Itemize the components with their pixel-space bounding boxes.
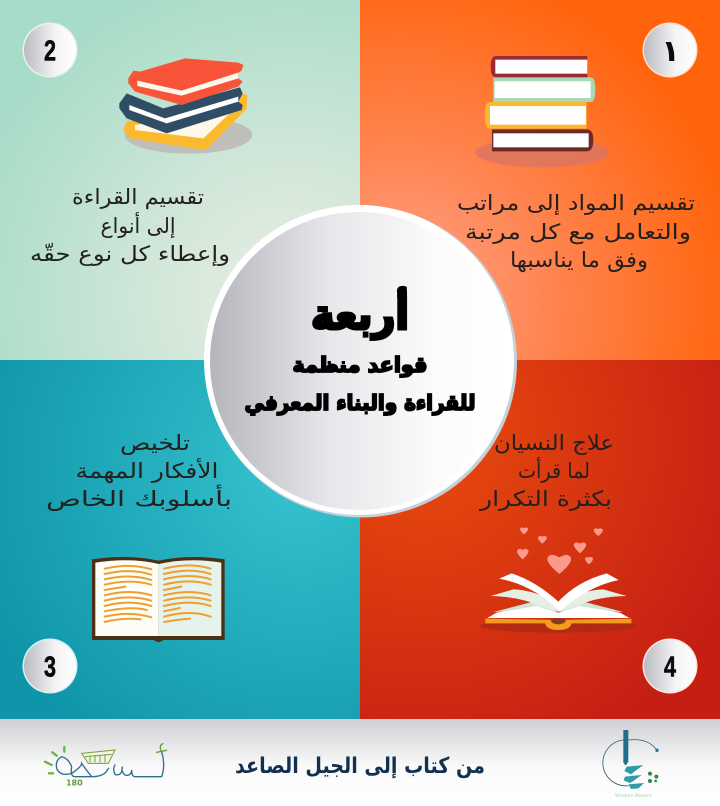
text: rule 3: تلخيص bbox=[120, 431, 190, 455]
text: rule 1: والتعامل مع كل مرتبة bbox=[465, 220, 691, 244]
panel: rule 1 background bbox=[360, 0, 720, 360]
text: rule 1: تقسيم المواد إلى مراتب bbox=[457, 191, 695, 216]
badge: number 3: 3 bbox=[44, 652, 56, 684]
text: rule 2: وإعطاء كل نوع حقّه bbox=[30, 242, 230, 267]
badge: number 2 bbox=[22, 22, 78, 78]
badge: number 3 bbox=[22, 638, 78, 694]
badge: number 2: 2 bbox=[44, 36, 56, 68]
text: rule 3 bbox=[46, 431, 232, 511]
text: rule 3: الأفكار المهمة bbox=[76, 458, 218, 483]
text: rule 4: بكثرة التكرار bbox=[479, 487, 612, 511]
text: rule 3: بأسلوبك الخاص bbox=[46, 484, 232, 511]
logo: Osbooha 180: 180 bbox=[66, 779, 83, 788]
panel: rule 4 background bbox=[360, 360, 720, 719]
panel: rule 3 background bbox=[0, 360, 360, 719]
text: rule 1: وفق ما يناسبها bbox=[510, 248, 648, 272]
icon: open book, rule 3 bbox=[92, 557, 225, 642]
panel: central circle bbox=[204, 205, 517, 518]
text: rule 2: إلى أنواع bbox=[100, 212, 176, 239]
text: rule 2 bbox=[30, 185, 230, 267]
subheading: for reading and knowledge building: للقراءة والبناء المعرفي bbox=[244, 391, 476, 415]
heading: four: أربعة bbox=[311, 287, 409, 339]
icon: stacked books, rule 1 bbox=[475, 56, 609, 167]
text: rule 4: لما قرأت bbox=[518, 457, 590, 483]
badge: number 4 bbox=[642, 638, 698, 694]
logo: Osbooha 180 bbox=[45, 744, 167, 788]
icon: open book with hearts, rule 4 bbox=[480, 527, 637, 633]
text: rule 4: علاج النسيان bbox=[494, 431, 614, 456]
logo: publisher bbox=[603, 730, 659, 799]
icon: stacked books, rule 2 bbox=[119, 58, 252, 154]
subheading: organised rules: قواعد منظمة bbox=[292, 353, 428, 377]
badge: number 1: ١ bbox=[661, 34, 680, 69]
text: rule 4 bbox=[479, 431, 614, 511]
badge: number 4: 4 bbox=[664, 652, 676, 684]
text: rule 2: تقسيم القراءة bbox=[72, 185, 204, 210]
panel: footer band bbox=[0, 719, 720, 806]
logo: publisher: Wisdom Makers bbox=[615, 793, 652, 799]
badge: number 1 bbox=[642, 22, 698, 78]
footer caption: من كتاب إلى الجيل الصاعد bbox=[235, 754, 485, 779]
panel: rule 2 background bbox=[0, 0, 360, 360]
text: rule 1 bbox=[457, 191, 695, 272]
